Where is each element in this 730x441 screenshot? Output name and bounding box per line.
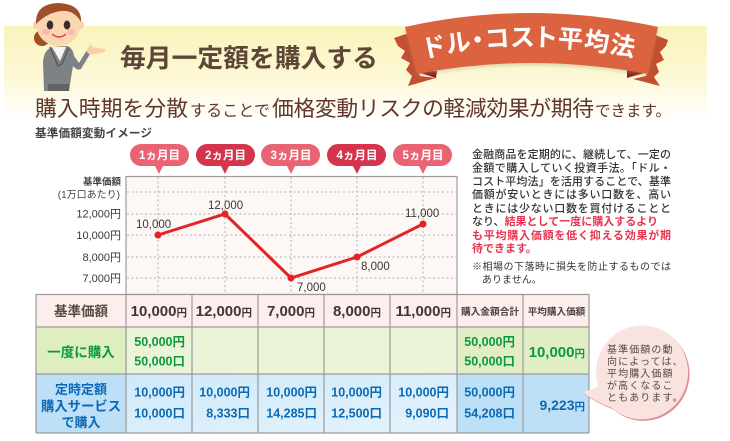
row: 基準価額: 平均購入価額 xyxy=(528,306,586,318)
y axis labels: 7,000円 xyxy=(82,273,121,285)
row: 一度に購入: 50,000円 xyxy=(464,335,515,349)
line chart xyxy=(126,176,457,294)
row: 定時定額購入サービスで購入: で購入 xyxy=(61,415,101,430)
row: 一度に購入: 50,000円 xyxy=(134,335,185,349)
y axis labels xyxy=(58,176,121,285)
explanation text xyxy=(472,147,671,255)
ribbon: ドル・コスト平均法 xyxy=(394,13,668,86)
row: 定時定額購入サービスで購入: 9,223円 xyxy=(539,397,585,413)
explanation text: ときには少ない口数を買付けることと xyxy=(472,201,671,215)
explanation text: なり、結果として一度に購入するより xyxy=(472,214,658,228)
line chart: 8,000 xyxy=(361,261,390,273)
callout: note on average price: ともあります。 xyxy=(607,392,684,404)
explanation text: 金融商品を定期的に、継続して、一定の xyxy=(472,147,671,161)
y axis labels: 8,000円 xyxy=(82,252,121,264)
callout: note on average price: 向によっては、 xyxy=(607,355,684,368)
row: 定時定額購入サービスで購入: 50,000円 xyxy=(464,386,515,400)
row: 基準価額 xyxy=(54,303,586,320)
subtitle: 購入時期を分散 xyxy=(35,96,188,121)
month labels: 5ヵ月目 xyxy=(403,149,443,162)
row: 一度に購入 xyxy=(47,335,585,368)
row: 一度に購入: 50,000口 xyxy=(464,354,515,368)
ribbon: ドル・コスト平均法: ドル・コスト平均法 xyxy=(426,26,634,58)
row: 一度に購入: 50,000口 xyxy=(134,354,185,368)
title: 毎月一定額を購入する xyxy=(120,44,378,73)
row: 定時定額購入サービスで購入: 9,090口 xyxy=(405,406,449,420)
row: 定時定額購入サービスで購入 xyxy=(41,382,585,430)
row: 基準価額: 10,000円 xyxy=(131,303,187,320)
y axis labels: 12,000円 xyxy=(76,208,121,220)
row: 定時定額購入サービスで購入: 54,208口 xyxy=(464,406,515,420)
callout: note on average price: 平均購入価額 xyxy=(607,367,674,380)
subtitle: できます。 xyxy=(595,102,671,120)
subtitle: することで xyxy=(190,102,270,120)
month labels: 1ヵ月目 xyxy=(139,149,180,162)
explanation text: 価額が安いときには多い口数を、高い xyxy=(472,187,671,201)
explanation text: も平均購入価額を低く抑える効果が期 xyxy=(472,228,671,242)
callout: note on average price xyxy=(582,325,690,421)
note: ありません。 xyxy=(482,274,542,286)
comparison table xyxy=(36,294,589,433)
row: 定時定額購入サービスで購入: 10,000口 xyxy=(134,406,185,420)
header band xyxy=(4,26,707,120)
subtitle: 価格変動リスクの軽減効果が期待 xyxy=(272,96,594,121)
row: 定時定額購入サービスで購入: 12,500口 xyxy=(331,406,382,420)
row: 定時定額購入サービスで購入: 8,333口 xyxy=(206,406,250,420)
y axis labels: (1万口あたり) xyxy=(58,189,120,201)
callout: note on average price: 基準価額の動 xyxy=(607,343,674,356)
row: 定時定額購入サービスで購入: 定時定額 xyxy=(55,382,107,397)
explanation text: 待できます。 xyxy=(472,241,537,255)
row: 定時定額購入サービスで購入: 14,285口 xyxy=(266,406,317,420)
row: 定時定額購入サービスで購入: 10,000円 xyxy=(331,386,382,400)
y axis labels: 基準価額 xyxy=(83,176,121,188)
chart heading: 基準価額変動イメージ xyxy=(35,126,152,140)
row: 定時定額購入サービスで購入: 10,000円 xyxy=(398,386,449,400)
month labels: 4ヵ月目 xyxy=(337,149,377,162)
row: 基準価額: 基準価額 xyxy=(54,303,108,319)
row: 基準価額: 11,000円 xyxy=(395,303,451,320)
row: 定時定額購入サービスで購入: 10,000円 xyxy=(134,386,185,400)
row: 定時定額購入サービスで購入: 購入サービス xyxy=(41,398,121,414)
line chart: 7,000 xyxy=(297,282,326,294)
illustration: woman in a suit xyxy=(33,3,105,91)
row: 一度に購入: 一度に購入 xyxy=(47,344,115,360)
line chart: 11,000 xyxy=(405,208,439,220)
note xyxy=(472,260,671,286)
row: 基準価額: 購入金額合計 xyxy=(461,305,519,318)
row: 一度に購入: 10,000円 xyxy=(529,344,585,361)
y axis labels: 10,000円 xyxy=(76,230,121,242)
callout: note on average price: が高くなるこ xyxy=(607,379,674,392)
line chart: 10,000 xyxy=(136,219,171,231)
note: ※相場の下落時に損失を防止するものでは xyxy=(472,260,671,273)
row: 基準価額: 7,000円 xyxy=(267,303,315,320)
row: 定時定額購入サービスで購入: 10,000円 xyxy=(266,386,317,400)
row: 基準価額: 12,000円 xyxy=(196,303,252,320)
row: 定時定額購入サービスで購入: 10,000円 xyxy=(199,386,250,400)
line chart: 12,000 xyxy=(208,200,243,212)
explanation text: コスト平均法」を活用することで、基準 xyxy=(472,174,671,188)
month labels: 2ヵ月目 xyxy=(205,149,246,162)
explanation text: 金額で購入していく投資手法。「ドル・ xyxy=(472,160,671,174)
month labels xyxy=(130,144,452,174)
month labels: 3ヵ月目 xyxy=(271,149,311,162)
row: 基準価額: 8,000円 xyxy=(333,303,381,320)
